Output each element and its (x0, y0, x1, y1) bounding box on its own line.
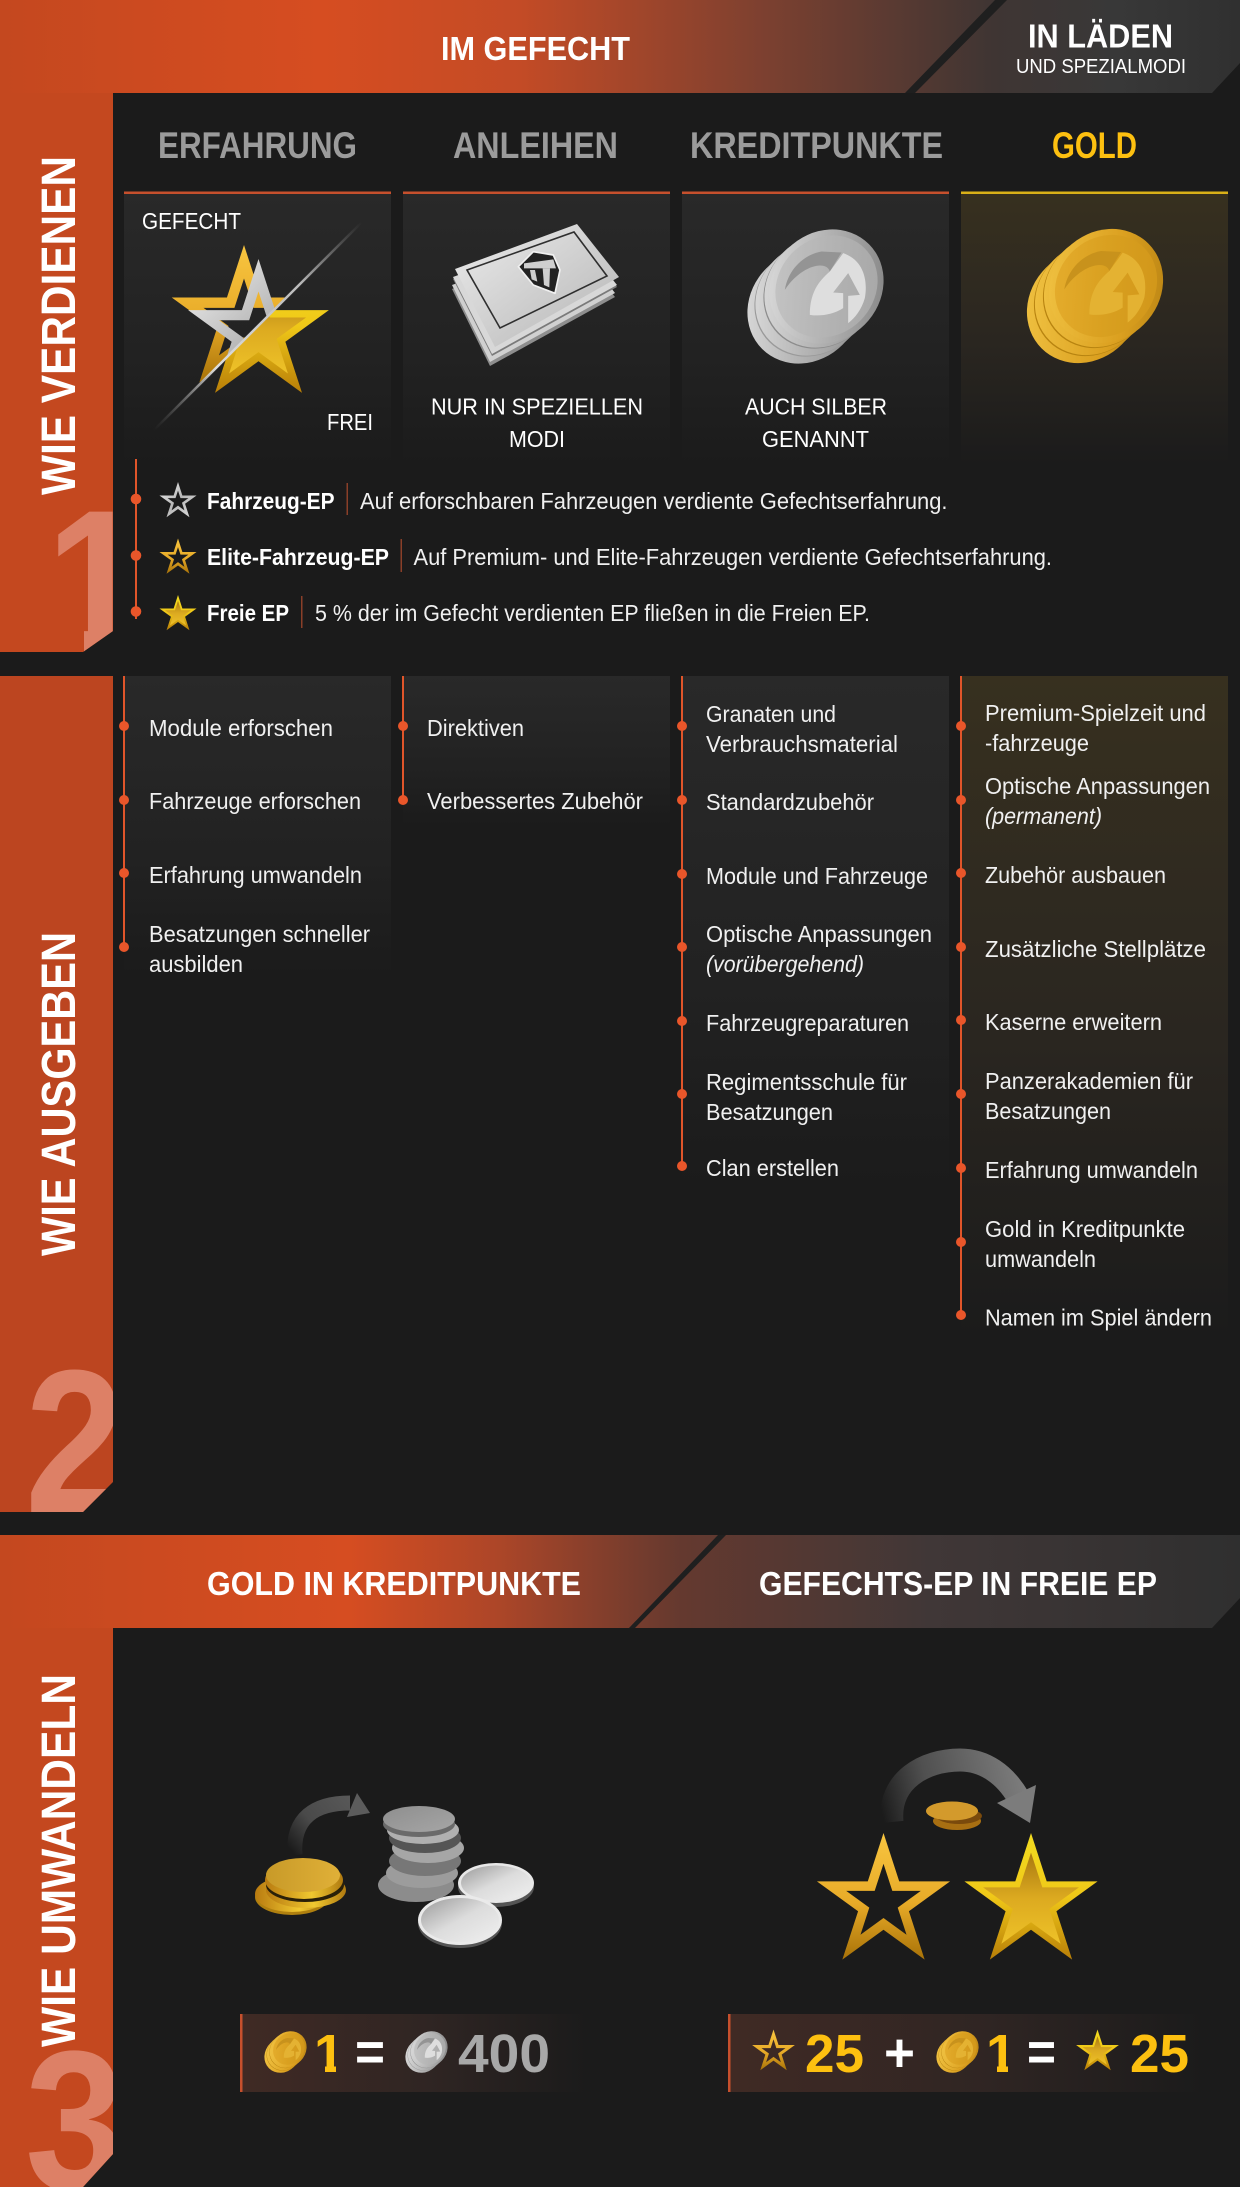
icon: bond stack (452, 224, 619, 366)
item: Module erforschen (149, 715, 333, 741)
item: Fahrzeugreparaturen (706, 1010, 909, 1036)
item: Standardzubehör (706, 789, 874, 815)
icon: loose silver coins (418, 1863, 534, 1948)
header banner: im gefecht / in läden: UND SPEZIALMODI (1016, 56, 1186, 78)
item: Gold in Kreditpunkte (985, 1216, 1185, 1242)
panel: kreditpunkte card: GENANNT (762, 426, 869, 452)
icon: outline star (817, 1833, 950, 1960)
legend item: freie ep (131, 595, 870, 630)
item: (vorübergehend) (706, 951, 864, 977)
panel: erfahrung card: GEFECHT (142, 208, 241, 234)
equation: xp to free xp: + (884, 2023, 915, 2083)
illustration: gold to credits (255, 1793, 534, 1948)
item: Besatzungen schneller (149, 921, 370, 947)
item: Zusätzliche Stellplätze (985, 936, 1206, 962)
equation: gold to credits: 400 (458, 2024, 550, 2084)
column heading: anleihen: ANLEIHEN (453, 125, 618, 166)
icon: gold coin stack (255, 1858, 346, 1915)
legend item: elite-fahrzeug-ep (131, 538, 1052, 574)
sidebar: section 2: 2 (25, 1328, 125, 1556)
item (956, 1216, 1185, 1272)
item: Premium-Spielzeit und (985, 700, 1206, 726)
item (956, 700, 1206, 756)
item: umwandeln (985, 1246, 1096, 1272)
sidebar: section 2 (0, 676, 113, 1512)
item (677, 701, 898, 757)
equation: xp to free xp: = (1027, 2022, 1056, 2082)
column heading: kreditpunkte: KREDITPUNKTE (690, 125, 943, 166)
item: Kaserne erweitern (985, 1009, 1162, 1035)
panel: anleihen card (403, 192, 670, 464)
item: Verbessertes Zubehör (427, 788, 643, 814)
section 2: wie ausgeben (0, 676, 1228, 1556)
equation: xp to free xp: 25 (805, 2024, 864, 2084)
panel: anleihen card: NUR IN SPEZIELLEN (431, 394, 643, 420)
item: -fahrzeuge (985, 730, 1089, 756)
panel: kreditpunkte card: AUCH SILBER (745, 394, 887, 420)
equation: xp to free xp (728, 2014, 1202, 2092)
header banner: conversions: GEFECHTS-EP IN FREIE EP (759, 1565, 1157, 1602)
item: Granaten und (706, 701, 836, 727)
icon: outline star (752, 2030, 795, 2070)
icon: silver coin (398, 2024, 455, 2080)
arrow: gold to credits (295, 1793, 370, 1855)
icon: gold coins (1003, 205, 1187, 387)
icon: silver coin stack (378, 1806, 464, 1902)
header banner: im gefecht / in läden: IM GEFECHT (441, 30, 630, 67)
icon: gold coin (929, 2024, 986, 2080)
item: Besatzungen (706, 1099, 833, 1125)
item: Besatzungen (985, 1098, 1111, 1124)
icon: small gold coins (926, 1802, 982, 1830)
item: Zubehör ausbauen (985, 862, 1166, 888)
equation: xp to free xp: 1 (986, 2024, 1016, 2084)
legend: experience types (131, 459, 1052, 630)
column heading: erfahrung: ERFAHRUNG (158, 125, 357, 166)
panel: anleihen card: MODI (509, 426, 565, 452)
panel: erfahrung spend list (119, 676, 391, 977)
sidebar: section 1: WIE VERDIENEN (33, 156, 86, 495)
header banner: conversions: GOLD IN KREDITPUNKTE (207, 1565, 581, 1602)
equation: gold to credits: 1 (314, 2024, 344, 2084)
item: Namen im Spiel ändern (985, 1304, 1212, 1330)
item: Regimentsschule für (706, 1069, 907, 1095)
sidebar: section 2: WIE AUSGEBEN (33, 932, 86, 1256)
sidebar: section 1 (0, 93, 113, 652)
item: Erfahrung umwandeln (985, 1157, 1198, 1183)
item: Module und Fahrzeuge (706, 863, 928, 889)
icon: tank logo shield (518, 252, 560, 293)
item: Verbrauchsmaterial (706, 731, 898, 757)
column heading: gold: GOLD (1052, 125, 1137, 166)
panel: gold card (961, 192, 1228, 464)
panel: erfahrung card: FREI (327, 409, 373, 435)
arrow: xp conversion (892, 1760, 1036, 1823)
item: Panzerakademien für (985, 1068, 1193, 1094)
equation: gold to credits (240, 2014, 548, 2092)
header banner: im gefecht / in läden (0, 0, 1240, 93)
item: ausbilden (149, 951, 243, 977)
panel: gold spend list (956, 676, 1228, 1336)
item (677, 1069, 907, 1125)
sidebar: section 3: WIE UMWANDELN (33, 1674, 86, 2047)
sidebar: section 3 (0, 1628, 113, 2187)
item: Direktiven (427, 715, 524, 741)
legend item: fahrzeug-ep: Fahrzeug-EP (207, 488, 334, 514)
legend item: fahrzeug-ep (131, 482, 947, 517)
item: Optische Anpassungen (985, 773, 1210, 799)
icon: full star (964, 1833, 1098, 1960)
item: (permanent) (985, 803, 1102, 829)
panel: kreditpunkte spend list (677, 676, 949, 1186)
panel: erfahrung card (124, 192, 391, 430)
section 3: wie umwandeln (0, 1535, 1240, 2187)
illustration: battle xp to free xp (817, 1760, 1098, 1960)
section 1: wie verdienen (0, 0, 1240, 696)
panel: kreditpunkte card (682, 192, 949, 464)
legend item: fahrzeug-ep: Auf erforschbaren Fahrzeugen verdiente Gefechtserfahrung. (360, 488, 948, 514)
legend item: freie ep: Freie EP (207, 600, 289, 626)
icon: split star (154, 222, 362, 430)
legend item: elite-fahrzeug-ep: Auf Premium- und Elite-Fahrzeugen verdiente Gefechtserfahrung. (414, 544, 1052, 570)
sidebar: section 1: 1 (46, 468, 146, 696)
panel: anleihen spend list (398, 676, 670, 826)
icon: gold coin (257, 2024, 314, 2080)
header banner: conversions (0, 1535, 1240, 1628)
equation: gold to credits: = (355, 2022, 385, 2082)
item: Clan erstellen (706, 1155, 839, 1181)
item (956, 1068, 1193, 1124)
icon: silver coins (724, 206, 907, 387)
item (677, 921, 932, 977)
item: Fahrzeuge erforschen (149, 788, 361, 814)
header banner: im gefecht / in läden: IN LÄDEN (1028, 18, 1173, 54)
equation: xp to free xp: 25 (1130, 2024, 1189, 2084)
item: Erfahrung umwandeln (149, 862, 362, 888)
legend item: elite-fahrzeug-ep: Elite-Fahrzeug-EP (207, 544, 389, 570)
legend item: freie ep: 5 % der im Gefecht verdienten EP fließen in die Freien EP. (315, 600, 870, 626)
item (119, 921, 370, 977)
item: Optische Anpassungen (706, 921, 932, 947)
icon: full star (1076, 2030, 1119, 2070)
item (956, 773, 1210, 829)
